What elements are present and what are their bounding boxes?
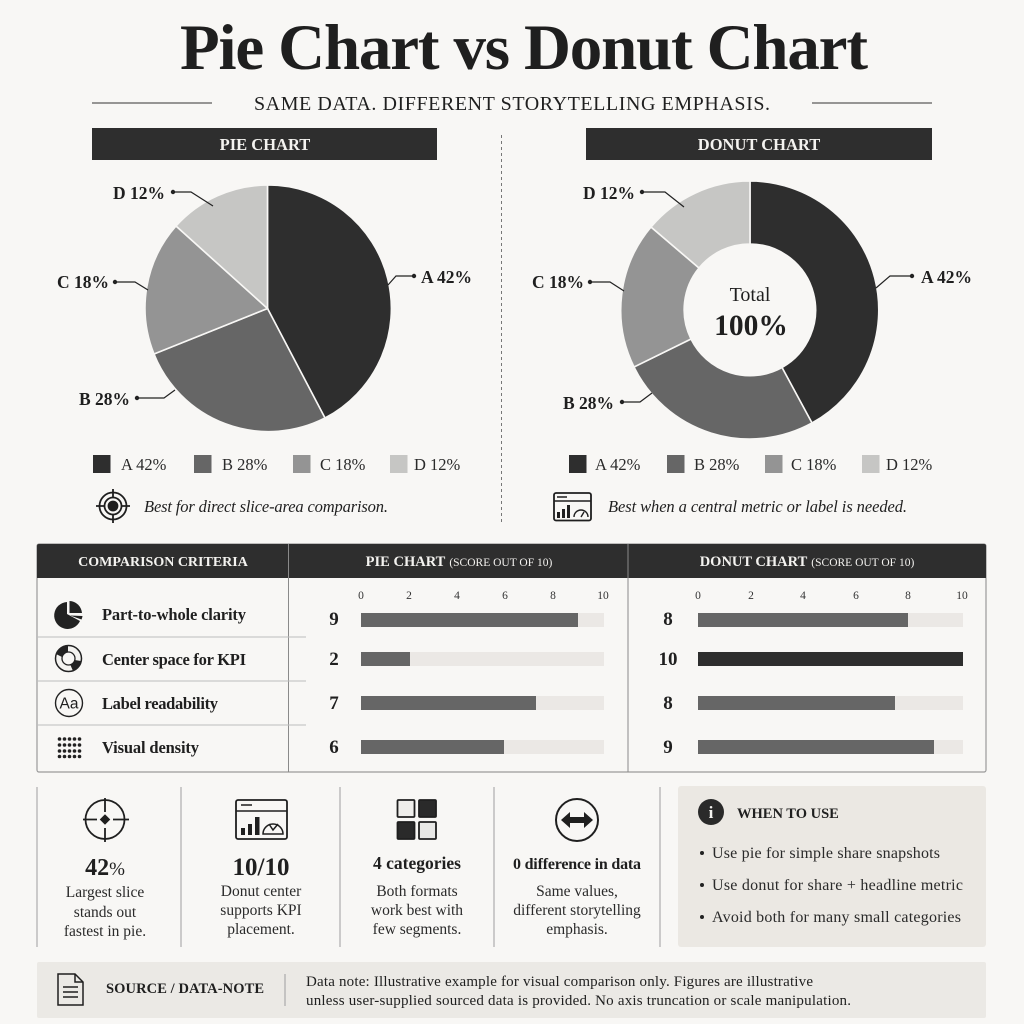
stat: 42%: Largest slice xyxy=(66,884,144,901)
donut callout labels: D 12% xyxy=(583,183,635,203)
icon: Aa xyxy=(56,690,82,716)
donut score bars: 10 xyxy=(956,590,968,602)
stat: 42%: 42% xyxy=(85,855,125,881)
stat: 0 difference xyxy=(513,799,641,938)
icon: double arrow xyxy=(556,799,598,841)
bullet list: Use pie for simple share snapshots xyxy=(712,845,940,862)
icon: pie xyxy=(54,601,82,629)
stat: 10/10: supports KPI xyxy=(220,902,302,919)
pie chart graphic xyxy=(145,185,391,432)
stat: 10/10: Donut center xyxy=(221,883,302,900)
donut note: Best when a central metric or label is needed. xyxy=(608,497,907,516)
subtitle: SAME DATA. DIFFERENT STORYTELLING EMPHASIS. xyxy=(254,93,770,115)
icon: Aa: Aa xyxy=(60,696,79,712)
panel: when to use xyxy=(678,786,986,947)
criteria rows: Center space for KPI xyxy=(102,650,246,669)
criteria rows: Visual density xyxy=(102,738,200,757)
stat: 4 categories xyxy=(371,800,463,938)
pie score bars: 4 xyxy=(454,590,460,602)
donut callout labels xyxy=(532,183,972,413)
table header: PIE CHART (SCORE OUT OF 10) xyxy=(366,554,552,570)
pie callout labels xyxy=(57,183,472,409)
pie note: Best for direct slice-area comparison. xyxy=(144,497,388,516)
data note text: unless user-supplied sourced data is provided. No axis truncation or scale manipulation. xyxy=(306,993,851,1009)
stat: 4 categories: few segments. xyxy=(373,921,461,938)
pie score bars: 6 xyxy=(502,590,508,602)
icon: target xyxy=(96,489,130,523)
donut score bars: 8 xyxy=(663,693,673,714)
pie score bars: 9 xyxy=(329,609,339,630)
panel: comparison table xyxy=(37,544,986,772)
donut score bars xyxy=(658,590,968,758)
pie callout labels: C 18% xyxy=(57,272,109,292)
donut callout labels: C 18% xyxy=(532,272,584,292)
donut score bars: 4 xyxy=(800,590,806,602)
pie legend: A 42% xyxy=(121,455,167,474)
donut callout labels: B 28% xyxy=(563,393,614,413)
pie legend: C 18% xyxy=(320,455,366,474)
panel: donut chart xyxy=(532,128,972,520)
donut score bars: 2 xyxy=(748,590,754,602)
pie callout labels: B 28% xyxy=(79,389,130,409)
pie score bars xyxy=(329,590,609,758)
pie score bars: 0 xyxy=(358,590,364,602)
donut legend xyxy=(569,455,933,474)
criteria rows: Label readability xyxy=(102,694,219,713)
pie legend: D 12% xyxy=(414,455,461,474)
bullet list: Use donut for share + headline metric xyxy=(712,877,963,894)
pie heading xyxy=(92,128,437,160)
pie score bars: 2 xyxy=(329,649,339,670)
title: Pie Chart vs Donut Chart xyxy=(180,12,868,84)
panel: pie chart xyxy=(57,128,472,523)
pie callout labels: A 42% xyxy=(421,267,472,287)
stat: 0 difference: 0 difference in data xyxy=(513,856,641,873)
panel: when to use: WHEN TO USE xyxy=(737,806,839,822)
icon: info: i xyxy=(709,803,714,822)
icon: crosshair xyxy=(83,798,129,842)
table header: DONUT CHART (SCORE OUT OF 10) xyxy=(700,554,914,570)
icon: donut xyxy=(56,646,82,672)
stat: 10/10 xyxy=(220,800,302,938)
table header xyxy=(37,544,986,578)
donut score bars: 0 xyxy=(695,590,701,602)
donut legend: D 12% xyxy=(886,455,933,474)
table header: COMPARISON CRITERIA xyxy=(78,555,249,570)
pie score bars: 6 xyxy=(329,737,339,758)
donut legend: A 42% xyxy=(595,455,641,474)
donut heading xyxy=(586,128,932,160)
pie legend: B 28% xyxy=(222,455,268,474)
panel: source note: SOURCE / DATA-NOTE xyxy=(106,981,264,997)
criteria rows xyxy=(54,601,247,758)
stat: 10/10: placement. xyxy=(227,921,295,938)
criteria rows: Part-to-whole clarity xyxy=(102,605,247,624)
donut chart graphic xyxy=(621,181,879,439)
donut center total: Total xyxy=(730,284,771,306)
stat: 0 difference: emphasis. xyxy=(546,921,608,938)
stat: 4 categories: Both formats xyxy=(376,883,458,900)
icon: document xyxy=(58,974,83,1005)
stat: 0 difference: different storytelling xyxy=(513,902,641,919)
stat: 4 categories: 4 categories xyxy=(373,853,461,873)
icon: dots xyxy=(58,737,81,758)
donut legend: C 18% xyxy=(791,455,837,474)
bullet list xyxy=(700,845,963,926)
donut callout labels: A 42% xyxy=(921,267,972,287)
pie score bars: 2 xyxy=(406,590,412,602)
donut score bars: 10 xyxy=(658,649,678,670)
icon: dashboard xyxy=(554,493,591,520)
donut legend: B 28% xyxy=(694,455,740,474)
donut center total: 100% xyxy=(714,310,788,342)
stat: 42%: fastest in pie. xyxy=(64,923,146,940)
stat: 10/10: 10/10 xyxy=(233,854,289,881)
pie score bars: 7 xyxy=(329,693,339,714)
data note text: Data note: Illustrative example for visual comparison only. Figures are illustrative xyxy=(306,974,813,990)
stat: 42% xyxy=(64,798,146,940)
icon: dashboard xyxy=(236,800,287,839)
donut heading: DONUT CHART xyxy=(698,135,820,154)
icon: info xyxy=(698,799,724,825)
data note text xyxy=(306,974,851,1009)
donut score bars: 6 xyxy=(853,590,859,602)
donut score bars: 8 xyxy=(663,609,673,630)
donut score bars: 9 xyxy=(663,737,673,758)
pie score bars: 8 xyxy=(550,590,556,602)
stat: 42%: stands out xyxy=(74,904,137,921)
stat: 4 categories: work best with xyxy=(371,902,463,919)
icon: squares xyxy=(398,800,436,839)
pie legend xyxy=(93,455,461,474)
panel: source note xyxy=(37,962,986,1018)
donut score bars: 8 xyxy=(905,590,911,602)
bullet list: Avoid both for many small categories xyxy=(712,909,961,926)
donut center total xyxy=(714,284,788,342)
pie score bars: 10 xyxy=(597,590,609,602)
stat: 0 difference: Same values, xyxy=(536,883,618,900)
pie heading: PIE CHART xyxy=(220,135,310,154)
pie callout labels: D 12% xyxy=(113,183,165,203)
